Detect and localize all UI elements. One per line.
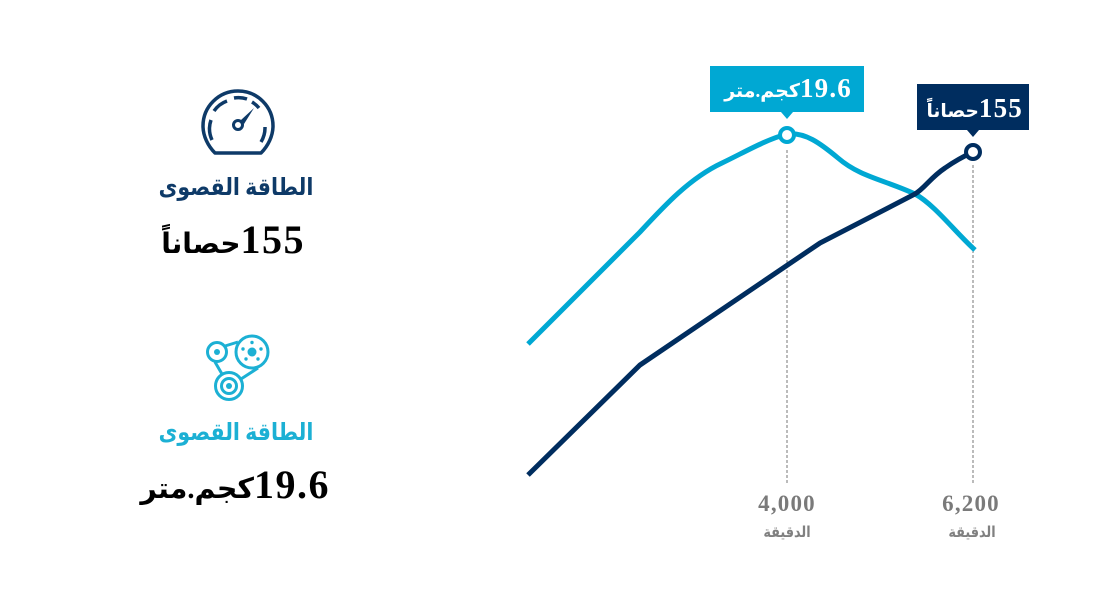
value: torque: كجم.متر	[140, 474, 254, 505]
callout text: torque: 19.6	[800, 73, 852, 103]
axis unit: 4,000: الدقيقة	[763, 525, 811, 541]
power callout box	[917, 84, 1029, 137]
callout text: power	[926, 93, 1023, 123]
torque callout box	[710, 66, 864, 119]
axis label: 6,200: 6,200	[942, 491, 1000, 516]
heading: maximum power: الطاقة القصوى	[159, 175, 313, 201]
icon: pulley belt	[208, 336, 268, 400]
axis unit: 6,200: الدقيقة	[948, 525, 996, 541]
callout text: torque	[723, 73, 852, 103]
value: torque: 19.6	[254, 462, 330, 507]
value: horsepower: حصاناً	[161, 229, 240, 260]
callout text: power: 155	[979, 93, 1023, 123]
heading: maximum torque: الطاقة القصوى	[159, 420, 313, 446]
callout text: torque: كجم.متر	[724, 81, 800, 102]
torque peak marker	[780, 128, 794, 142]
power peak marker	[966, 145, 980, 159]
value: torque	[139, 462, 330, 507]
icon: gauge	[203, 91, 273, 153]
value: horsepower: 155	[240, 217, 305, 262]
power curve	[528, 152, 973, 475]
value: horsepower	[161, 217, 305, 262]
axis label: 4,000: 4,000	[758, 491, 816, 516]
callout text: power: حصاناً	[926, 102, 979, 122]
torque curve	[528, 134, 975, 344]
